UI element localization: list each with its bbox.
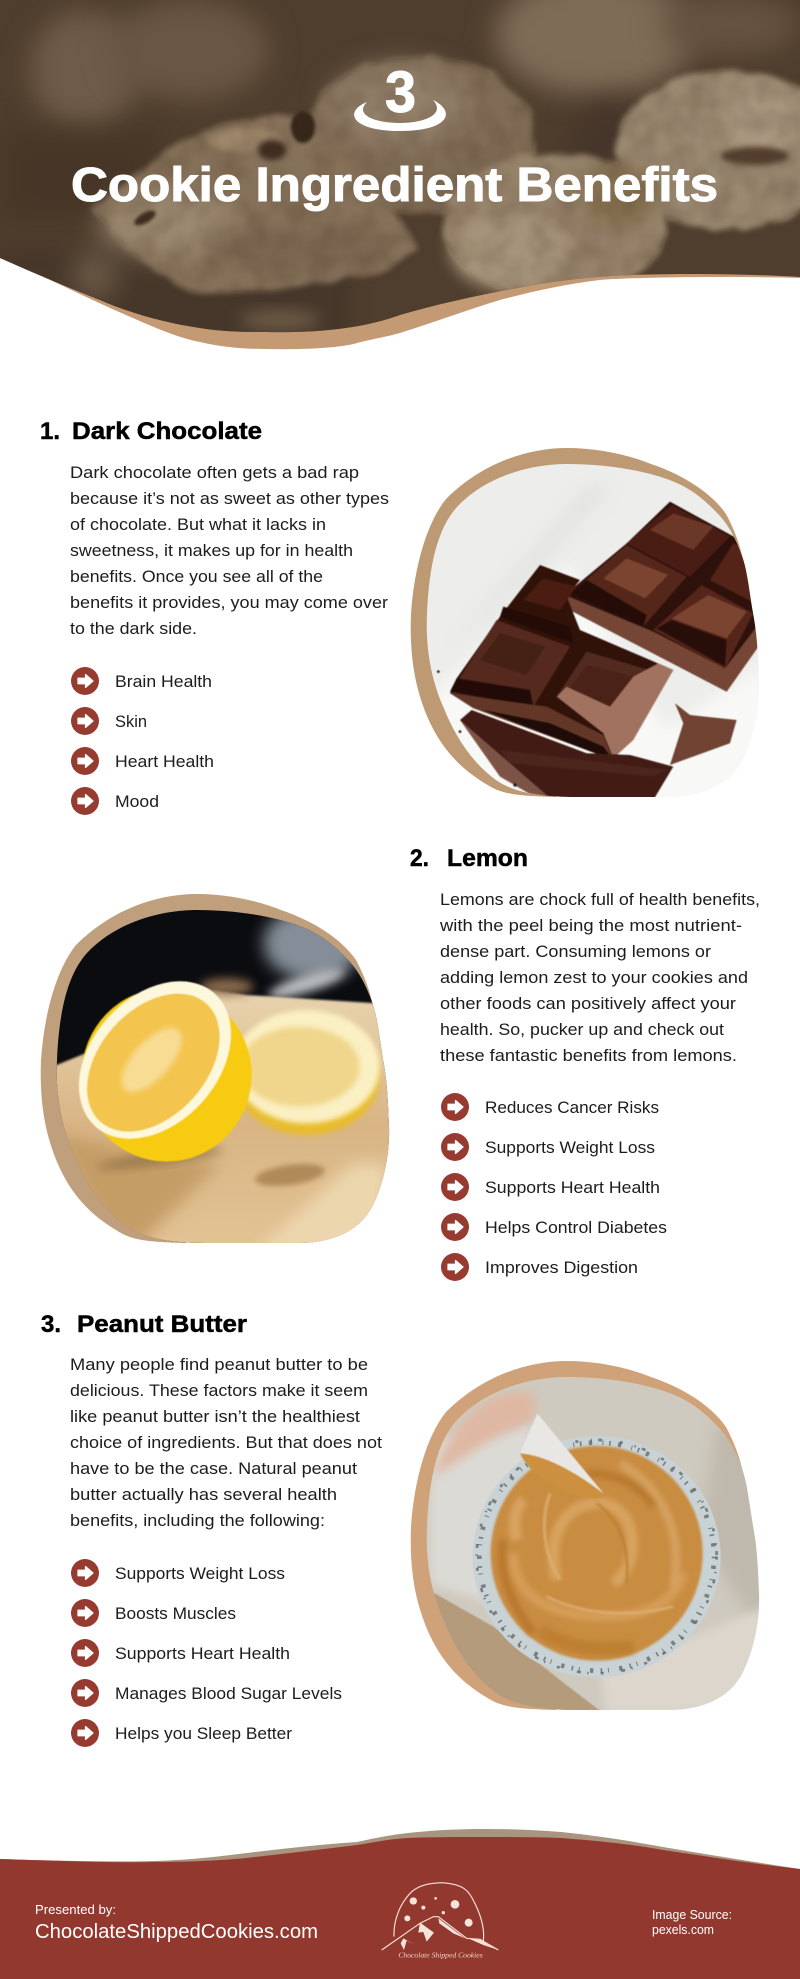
text block: dark chocolate description [70, 464, 389, 638]
footer background [0, 1837, 800, 1979]
text block: lemon description: Lemons are chock full of health benefits, [440, 891, 760, 909]
text block: lemon description: health. So, pucker up and check out [440, 1021, 724, 1039]
icon: number 3 with ring [354, 60, 446, 131]
heading: dark chocolate: 1. [40, 418, 60, 445]
text block: lemon description: these fantastic benefits from lemons. [440, 1047, 737, 1065]
bullet list: lemon benefits: Helps Control Diabetes [485, 1219, 667, 1237]
heading: dark chocolate: Dark Chocolate [72, 418, 262, 445]
text block: peanut butter description: benefits, including the following: [70, 1512, 325, 1530]
panel: dark chocolate [40, 418, 800, 830]
bullet list: dark chocolate benefits [71, 667, 214, 815]
image source credit: Image Source: [652, 1907, 732, 1922]
image source credit: pexels.com [652, 1922, 714, 1937]
text block: peanut butter description: butter actually has several health [70, 1486, 337, 1504]
text block: lemon description: with the peel being the most nutrient- [439, 917, 742, 935]
bullet list: peanut butter benefits: Boosts Muscles [115, 1605, 236, 1623]
bullet list: dark chocolate benefits: Brain Health [115, 673, 212, 691]
text block: peanut butter description: Many people find peanut butter to be [70, 1356, 368, 1374]
text block: dark chocolate description: benefits. Once you see all of the [70, 568, 323, 586]
text block: dark chocolate description: Dark chocolate often gets a bad rap [70, 464, 359, 482]
bullet list: peanut butter benefits [71, 1559, 342, 1747]
text block: dark chocolate description: to the dark side. [70, 620, 197, 638]
panel: lemon [20, 845, 760, 1281]
photo: lemon [40, 894, 390, 1243]
text block: dark chocolate description: because it’s not as sweet as other types [70, 490, 389, 508]
text block: lemon description [439, 891, 760, 1065]
text block: peanut butter description: like peanut butter isn’t the healthiest [70, 1408, 360, 1426]
text block: peanut butter description [70, 1356, 382, 1530]
bullet list: dark chocolate benefits: Skin [115, 713, 147, 731]
cookie photograph [0, 0, 800, 350]
photo: peanut butter bowl [410, 1361, 760, 1710]
text block: dark chocolate description: sweetness, it makes up for in health [70, 542, 353, 560]
text block: peanut butter description: delicious. These factors make it seem [70, 1382, 368, 1400]
bullet list: dark chocolate benefits: Mood [115, 793, 159, 811]
text block: dark chocolate description: benefits it provides, you may come over [70, 594, 389, 612]
presenter credit: ChocolateShippedCookies.com [35, 1920, 318, 1943]
bullet list: lemon benefits [441, 1093, 667, 1281]
title: Cookie Ingredient Benefits [71, 159, 718, 212]
text block: peanut butter description: choice of ingredients. But that does not [70, 1434, 382, 1452]
text block: lemon description: adding lemon zest to your cookies and [440, 969, 748, 987]
text block: lemon description: dense part. Consuming lemons or [440, 943, 712, 961]
bullet list: peanut butter benefits: Helps you Sleep Better [115, 1725, 293, 1743]
broken piece [670, 703, 737, 765]
bullet list: peanut butter benefits: Supports Weight Loss [115, 1565, 285, 1583]
panel: peanut butter [41, 1311, 800, 1747]
bullet list: peanut butter benefits: Manages Blood Sugar Levels [115, 1685, 342, 1703]
text block: lemon description: other foods can positively affect your [440, 995, 737, 1013]
text block: peanut butter description: have to be the case. Natural peanut [70, 1460, 357, 1478]
bullet list: lemon benefits: Reduces Cancer Risks [485, 1099, 659, 1117]
heading: peanut butter: 3. [41, 1311, 61, 1338]
logo: cookie and mountains [382, 1883, 498, 1959]
heading: lemon: Lemon [447, 845, 528, 872]
dark specks [437, 670, 440, 673]
wave accent: footer [0, 1829, 800, 1900]
presenter credit [35, 1902, 318, 1943]
image source credit [652, 1907, 732, 1937]
header photo: blurred cookies [0, 0, 800, 350]
heading: lemon [410, 845, 528, 872]
footer band [0, 1829, 800, 1979]
bullet list: lemon benefits: Supports Heart Health [485, 1179, 660, 1197]
heading: peanut butter: Peanut Butter [77, 1311, 247, 1338]
text block: dark chocolate description: of chocolate. But what it lacks in [70, 516, 326, 534]
bullet list: lemon benefits: Supports Weight Loss [485, 1139, 655, 1157]
wave accent: tan band under header [0, 200, 800, 349]
bullet list: lemon benefits: Improves Digestion [485, 1259, 638, 1277]
logo: cookie and mountains: Chocolate Shipped Cookies [398, 1950, 483, 1959]
bottom slab [460, 710, 673, 800]
lower bar [450, 565, 673, 760]
heading: lemon: 2. [410, 845, 429, 872]
icon: number 3 with ring: 3 [385, 60, 416, 125]
upper bar [563, 502, 758, 692]
presenter credit: Presented by: [35, 1902, 116, 1917]
photo: chocolate bars [410, 448, 759, 797]
bullet list: peanut butter benefits: Supports Heart Health [115, 1645, 290, 1663]
bullet list: dark chocolate benefits: Heart Health [115, 753, 214, 771]
